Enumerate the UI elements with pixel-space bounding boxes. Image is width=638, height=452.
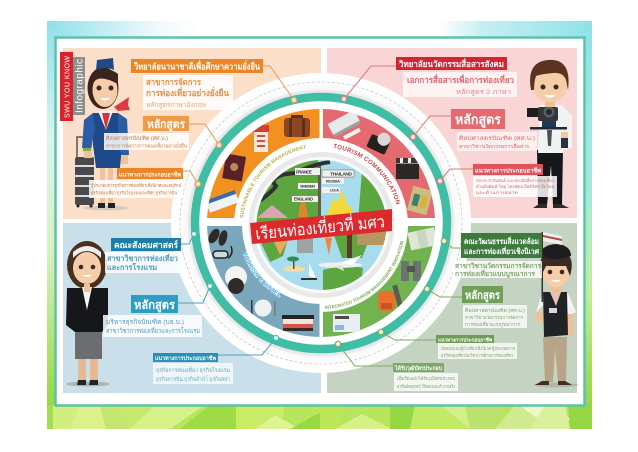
sector: green integrated tourism	[323, 226, 443, 339]
inner white ring with curved labels	[234, 138, 408, 312]
icon: magazine	[407, 186, 433, 215]
major line one: สาขาวิชาการท่องเที่ยว	[107, 252, 178, 263]
character: businesswoman	[66, 241, 110, 386]
icon: computer	[328, 112, 361, 140]
faculty label: วิทยาลัยนานาชาติเพื่อศึกษาความยั่งยืน	[133, 60, 261, 72]
sector: orange sustainable tourism	[205, 105, 320, 218]
brick tower	[357, 232, 386, 245]
careers line one: ผู้ประกอบการธุรกิจการท่องเที่ยวเชิงนิเวศและอนุรักษ์	[91, 182, 181, 189]
text block: bottom right faculty	[453, 233, 542, 279]
icon: backpack	[378, 285, 403, 311]
signpost	[292, 166, 354, 218]
sailboat	[301, 263, 317, 280]
careers line two: ธุรกิจท่องเที่ยวนักวิชาการด้านการท่องเที่ยว	[441, 352, 513, 359]
eiffel tower	[298, 195, 308, 217]
text block: bottom right curriculum	[462, 286, 527, 328]
curriculum heading: หลักสูตร	[147, 118, 185, 132]
text block: bottom left faculty	[105, 238, 181, 273]
program: สาขาวิชาการท่องเที่ยวและการโรงแรม	[106, 326, 200, 335]
major heading line two: การท่องเที่ยวอย่างยั่งยืน	[146, 86, 230, 98]
text block: top left careers	[89, 168, 183, 198]
degree: ศิลปศาสตรบัณฑิต (ศศ.บ.)	[465, 307, 525, 314]
major line two: การท่องเที่ยวแบบบูรณาการ	[455, 268, 536, 279]
sign: sweden: SWEDEN	[300, 184, 315, 189]
globe illustration	[256, 160, 388, 292]
icon: passport	[222, 153, 246, 182]
character: flight attendant	[75, 58, 130, 210]
white frame with teal border	[56, 38, 584, 406]
curriculum heading: หลักสูตร	[134, 298, 176, 313]
panel: top right pink	[327, 48, 577, 218]
red title banner	[250, 209, 392, 244]
central wheel outer white ring	[171, 73, 471, 373]
tag text infographic: Infographic	[74, 59, 86, 113]
road	[258, 162, 330, 202]
orange landmark	[325, 238, 332, 255]
icon: suitcase	[284, 115, 310, 137]
faculty label: คณะสังคมศาสตร์	[114, 239, 178, 250]
program: สาขาการจัดการการท่องเที่ยวอย่างยั่งยืน	[106, 142, 188, 150]
title text: เรียนท่องเที่ยวที่ มศว	[254, 210, 386, 243]
major line one: สาขาวิชานวัตกรรมการจัดการ	[455, 262, 542, 270]
faculty line one: คณะวัฒนธรรมสิ่งแวดล้อม	[464, 235, 539, 246]
careers text line two: ด้านสิ่งพิมพ์ วิทยุ โทรทัศน์ สื่อดิจิทัล สื่อใหม่	[476, 184, 554, 190]
text block: bottom right certificate	[393, 363, 458, 391]
careers line one: นักออกแบบผู้นำเที่ยวเชิงนิเวศ ผู้ประกอบการ	[441, 345, 515, 352]
curved label: tourism communication: TOURISM COMMUNICATION	[334, 144, 400, 204]
careers heading: แนวทางการประกอบอาชีพ	[438, 336, 493, 344]
degree: บริหารธุรกิจบัณฑิต (บธ.บ.)	[106, 318, 184, 326]
tag text: SWU YOU KNOW	[64, 56, 72, 118]
sector: red tourism communication	[323, 105, 443, 218]
certificate line one: เมื่อเรียนแล้วได้รับวุฒิบัตรประกอบ	[397, 375, 455, 382]
curriculum heading: หลักสูตร	[465, 289, 500, 303]
icon: binoculars	[401, 261, 421, 281]
sign: france: FRANCE	[296, 170, 312, 174]
program: สาขาวิชานวัตกรรมการสื่อสาร	[459, 143, 529, 150]
careers heading: แนวทางการประกอบอาชีพ	[475, 166, 541, 174]
certificate heading: ได้รับวุฒิบัตรประกอบ	[394, 364, 442, 372]
panel: top left peach	[63, 48, 321, 219]
mountain	[257, 205, 288, 218]
degree: ศิลปศาสตรบัณฑิต (ศศ.บ.)	[458, 135, 535, 142]
character: tour guide with flag	[534, 232, 578, 388]
bilingual note: หลักสูตร 2 ภาษา	[456, 88, 511, 96]
icon: fins	[208, 228, 228, 246]
big ben	[347, 234, 352, 258]
icon: plate and cutlery	[251, 300, 276, 316]
major heading: เอกการสื่อสารเพื่อการท่องเที่ยว	[407, 73, 514, 85]
text block: bottom left curriculum	[103, 295, 202, 337]
icon: bed	[282, 315, 314, 331]
english curriculum note: หลักสูตรภาษาอังกฤษ	[146, 101, 207, 109]
text block: top right careers	[473, 164, 557, 197]
faculty line two: และการท่องเที่ยวเชิงนิเวศ	[464, 245, 539, 256]
text block: top left college	[131, 59, 263, 110]
text block: top right curriculum	[451, 109, 537, 151]
airplane	[318, 255, 362, 271]
text block: top left curriculum	[104, 116, 189, 150]
sector: blue tourism and hotel	[205, 226, 320, 339]
text block: top right college	[396, 57, 517, 97]
teal ring	[195, 97, 447, 349]
icon: folding map	[407, 227, 438, 251]
careers text line three: และด้านการตลาด	[476, 190, 519, 195]
certificate line two: อาชีพมัคคุเทศก์ ใช้สอบและทำงานจริง	[397, 383, 455, 390]
careers heading: แนวทางการประกอบอาชีพ	[155, 354, 216, 362]
curved label: tourism and hotel: TOURISM & HOTEL	[242, 252, 280, 298]
suitcase	[75, 137, 94, 208]
panel: bottom right sage	[327, 223, 577, 393]
careers line one: ธุรกิจการท่องเที่ยว ธุรกิจโรงแรม	[156, 366, 230, 374]
patterned green and cyan background	[47, 21, 592, 429]
character: cameraman	[527, 60, 572, 208]
faculty label: วิทยาลัยนวัตกรรมสื่อสารสังคม	[399, 57, 504, 69]
careers text line one: นักประชาสัมพันธ์ และนักผลิตสื่อการท่องเที่ยว	[476, 178, 554, 183]
icon: spa face mask	[225, 266, 247, 294]
program line two: การท่องเที่ยวแบบบูรณาการ	[465, 321, 520, 328]
icon: id card	[333, 314, 360, 332]
sign: usa: USA	[330, 188, 339, 193]
curved label: sustainable tourism management: SUSTAINABLE TOURISM MANAGEMENT	[240, 145, 306, 218]
tan landmark	[273, 240, 288, 255]
sign: russia: RUSSIA	[326, 179, 340, 184]
yellow temple	[326, 190, 352, 216]
careers line two: ธุรกิจการบิน ธุรกิจสำนำ้ ธุรกิจสปา	[156, 375, 230, 383]
side tag: swu you know infographic	[60, 52, 86, 121]
connector lines and dots	[178, 66, 473, 366]
curriculum heading: หลักสูตร	[455, 112, 501, 128]
palm and beach	[283, 256, 305, 272]
icon: diving mask	[213, 246, 232, 258]
program line one: สาขาวิชานวัตกรรมการจัดการ	[465, 315, 523, 321]
icon: ticket	[206, 190, 239, 213]
degree: ศิลปศาสตรบัณฑิต (ศศ.บ.)	[105, 135, 168, 142]
major heading: สาขาการจัดการ	[146, 77, 201, 87]
icon: camera	[366, 132, 390, 154]
icon: hotel	[253, 125, 269, 152]
text block: bottom right careers	[436, 335, 517, 359]
sign: england: ENGLAND	[294, 197, 313, 202]
panel: bottom left blue	[63, 223, 321, 393]
icon: clapperboard	[396, 158, 419, 179]
text block: bottom left careers	[153, 353, 233, 384]
major line two: และการโรงแรม	[107, 262, 157, 272]
suitcase landmark	[297, 238, 313, 253]
careers line two: ธุรกิจท่องเที่ยว ธุรกิจโรงแรมและที่พัก ธุรกิจการบิน	[91, 190, 177, 196]
curved label: integrated tourism management innovation: INTEGRATED TOURISM MANAGEMENT INNOVATION	[325, 241, 404, 309]
careers heading: แนวทางการประกอบอาชีพ	[119, 170, 181, 178]
sign: thailand: THAILAND	[330, 172, 353, 178]
land masses	[256, 160, 388, 292]
